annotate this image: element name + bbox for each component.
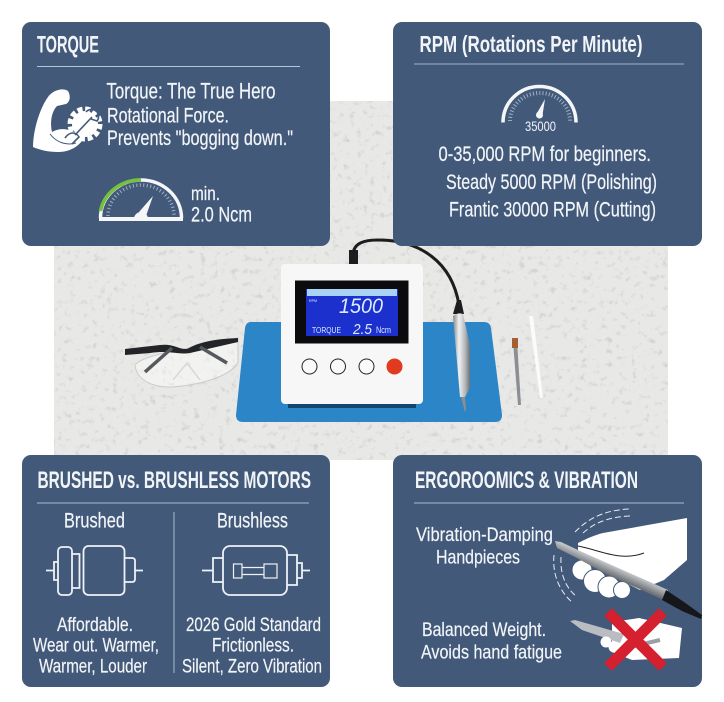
text block: torque description: Torque: The True Hero — [106, 78, 276, 104]
column: brushless — [182, 510, 322, 678]
torque gauge — [99, 180, 183, 221]
heading: motors: BRUSHED vs. BRUSHLESS MOTORS — [38, 467, 311, 494]
gauge label: minimum torque: min. — [191, 184, 220, 205]
LCD screen: TORQUE — [312, 326, 341, 335]
LCD screen: 2.5 — [352, 321, 373, 338]
text block: rpm ranges: Frantic 30000 RPM (Cutting) — [449, 198, 656, 222]
icon: brushed motor — [46, 546, 143, 595]
text block: brushed notes: Warmer, Louder — [39, 656, 148, 678]
text block: brushless notes: 2026 Gold Standard — [186, 615, 321, 636]
power cable — [353, 240, 459, 305]
icon: brushless motor — [202, 546, 310, 595]
rpm gauge: 35000 — [525, 118, 556, 134]
gauge label: minimum torque: 2.0 Ncm — [191, 204, 252, 226]
column: brushed: Brushed — [64, 510, 125, 532]
buttons — [302, 358, 402, 374]
brush — [512, 338, 521, 405]
text block: vibration damping: Vibration-Damping — [416, 524, 553, 546]
rpm gauge — [503, 87, 576, 134]
icon: flexed arm with gear — [33, 89, 100, 152]
text block: torque description: Prevents "bogging down." — [107, 127, 293, 150]
cable plug — [349, 250, 358, 264]
safety glasses — [125, 338, 238, 387]
LCD screen: Ncm — [376, 325, 391, 335]
text block: vibration damping — [416, 524, 553, 568]
text block: brushed notes — [33, 615, 159, 678]
fingers — [572, 560, 630, 598]
text block: rpm ranges: Steady 5000 RPM (Polishing) — [446, 171, 657, 194]
panel: ergonomics — [393, 455, 702, 687]
text block: vibration damping: Handpieces — [436, 546, 520, 568]
product photo: drill on mat — [125, 240, 543, 422]
text block: balanced weight: Balanced Weight. — [422, 619, 546, 641]
text block: torque description — [106, 78, 293, 150]
illustration: hand holding handpiece — [554, 509, 702, 619]
text block: balanced weight: Avoids hand fatigue — [421, 642, 562, 664]
red cross — [608, 612, 663, 667]
display bezel — [295, 280, 408, 344]
panel: rpm — [393, 22, 702, 246]
handpiece — [453, 300, 470, 412]
text block: brushless notes — [182, 615, 322, 678]
vibration arcs — [554, 509, 630, 603]
column: brushed — [33, 510, 159, 678]
text block: brushless notes: Frictionless. — [212, 636, 294, 656]
column: brushless: Brushless — [217, 510, 288, 532]
control unit — [281, 264, 423, 408]
LCD screen — [306, 289, 398, 338]
text block: brushless notes: Silent, Zero Vibration — [182, 656, 322, 678]
panel: motors — [22, 455, 330, 687]
white stick — [529, 316, 543, 398]
concrete background — [54, 101, 668, 460]
panel: torque — [22, 22, 330, 246]
text block: torque description: Rotational Force. — [107, 104, 229, 128]
LCD screen: RPM — [309, 298, 317, 303]
text block: balanced weight — [421, 619, 562, 664]
text block: rpm ranges: 0-35,000 RPM for beginners. — [438, 143, 651, 166]
text block: brushed notes: Wear out. Warmer, — [33, 636, 159, 656]
illustration: poor grip with red cross — [570, 612, 682, 667]
heading: torque: TORQUE — [37, 32, 99, 58]
gauge label: minimum torque — [191, 184, 252, 226]
LCD screen: 1500 — [339, 295, 383, 318]
text block: rpm ranges — [438, 143, 657, 222]
text block: brushed notes: Affordable. — [57, 615, 133, 636]
heading: rpm: RPM (Rotations Per Minute) — [420, 31, 642, 57]
blue mat — [236, 322, 502, 422]
